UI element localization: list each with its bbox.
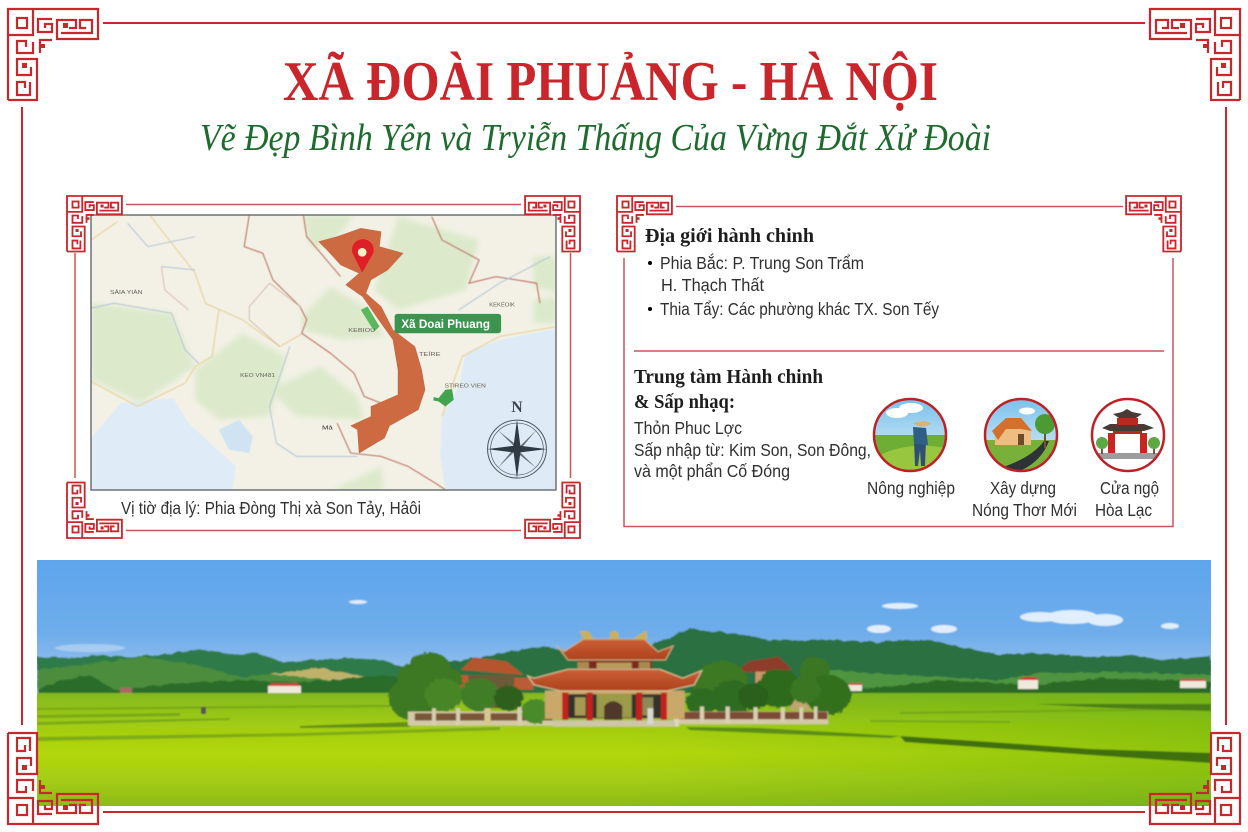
- merger text: và một phẩn Cố Đóng: [634, 461, 790, 481]
- map place labels: SẢIA YIÀN: [110, 289, 142, 296]
- title: XÃ ĐOÀI PHUẢNG - HÀ NỘI: [283, 50, 938, 113]
- icon caption: construction: Xây dựng: [990, 478, 1056, 498]
- boundaries list: H. Thạch Thất: [661, 275, 764, 295]
- rice field: [30, 693, 1220, 813]
- corner ornament: top right: [1150, 9, 1240, 100]
- heading: boundaries: Địa giới hành chinh: [645, 225, 815, 247]
- icon: new rural construction: [984, 398, 1058, 474]
- icon caption: agriculture: Nông nghiệp: [867, 478, 955, 498]
- map corner: top right: [525, 196, 580, 252]
- green highlight areas: [361, 307, 379, 332]
- map place labels: KEO VN481: [240, 373, 275, 379]
- heading: centre and merger: Trung tàm Hành chinh: [634, 366, 824, 388]
- temple complex: [389, 631, 851, 727]
- merger text: [634, 418, 871, 481]
- icon caption: construction: [972, 478, 1077, 520]
- icon caption: gateway: Hòa Lạc: [1095, 500, 1152, 520]
- upper storey: [577, 659, 652, 671]
- main gate lower storey: [545, 691, 685, 727]
- icon caption: construction: Nóng Thơr Mới: [972, 500, 1077, 520]
- panel corner: top left: [617, 196, 672, 252]
- map place labels: KEKÉOIK: [489, 302, 515, 309]
- icon caption: gateway: [1095, 478, 1159, 520]
- trees: [389, 652, 851, 724]
- vegetation areas: [91, 215, 557, 491]
- map place labels: STIREO VIEN: [445, 383, 486, 389]
- lower roof: [528, 669, 702, 691]
- left side hall: [449, 657, 533, 708]
- subtitle: Vẽ Đẹp Bình Yên và Tryiễn Thấng Của Vừng Đắt Xử Đoài: [200, 117, 991, 159]
- roof ornaments: [579, 631, 647, 639]
- merger text: Thỏn Phuc Lợc: [634, 418, 742, 438]
- icon caption: gateway: Cửa ngộ: [1100, 478, 1159, 498]
- boundaries list: Phia Bắc: P. Trung Son Trẩm: [660, 252, 864, 273]
- panoramic photo: temple in rice fields: [30, 552, 1220, 813]
- farmer in field: [201, 707, 206, 714]
- boundaries list: Thia Tẩy: Các phường khác TX. Son Tếy: [660, 299, 939, 319]
- merger text: Sấp nhập từ: Kim Son, Son Đông,: [634, 440, 871, 460]
- fence right: [674, 706, 828, 727]
- corner ornament: bottom right: [1150, 733, 1240, 824]
- map corner: bottom left: [67, 482, 122, 538]
- icon: Hoa Lac gateway: [1091, 398, 1165, 472]
- panel: administrative information: [617, 196, 1181, 526]
- distant hills: [37, 629, 1211, 700]
- lake: [219, 420, 253, 453]
- map corner: bottom right: [525, 482, 580, 538]
- heading: centre and merger: [634, 366, 824, 413]
- Vietnam region shape: [319, 228, 425, 453]
- compass rose: [487, 399, 547, 478]
- houses: [120, 677, 1206, 695]
- boundaries list: [648, 252, 939, 319]
- corner ornament: top left: [8, 9, 98, 100]
- map: [91, 215, 557, 491]
- corner ornament: bottom left: [8, 733, 98, 824]
- location pin: [352, 239, 374, 273]
- location label: Xã Doai Phuang: [401, 317, 490, 331]
- map place labels: [110, 289, 515, 431]
- map place labels: Mả: [322, 425, 334, 431]
- location label: [395, 314, 501, 333]
- field shadow bands: [37, 705, 1211, 741]
- roads and borders: [91, 215, 557, 490]
- fence left: [406, 706, 554, 727]
- compass rose: N: [511, 399, 523, 416]
- map corner: top left: [67, 196, 122, 252]
- panel: location map: [67, 196, 580, 538]
- map caption: Vị tiờ địa lý: Phia Đòng Thị xà Son Tảy, Hảôi: [121, 498, 421, 518]
- upper roof: [556, 639, 673, 660]
- map place labels: KEBIOU: [348, 328, 375, 334]
- panel frame lines: [75, 204, 570, 530]
- clouds: [55, 600, 1179, 652]
- sea areas: [91, 328, 557, 491]
- panel frame lines: [624, 206, 1173, 526]
- panel corner: top right: [1126, 196, 1181, 252]
- map place labels: TEÍRE: [419, 351, 441, 358]
- heading: centre and merger: & Sấp nhạq:: [634, 391, 735, 413]
- right side hall: [736, 657, 811, 710]
- icon: agriculture: [873, 398, 947, 472]
